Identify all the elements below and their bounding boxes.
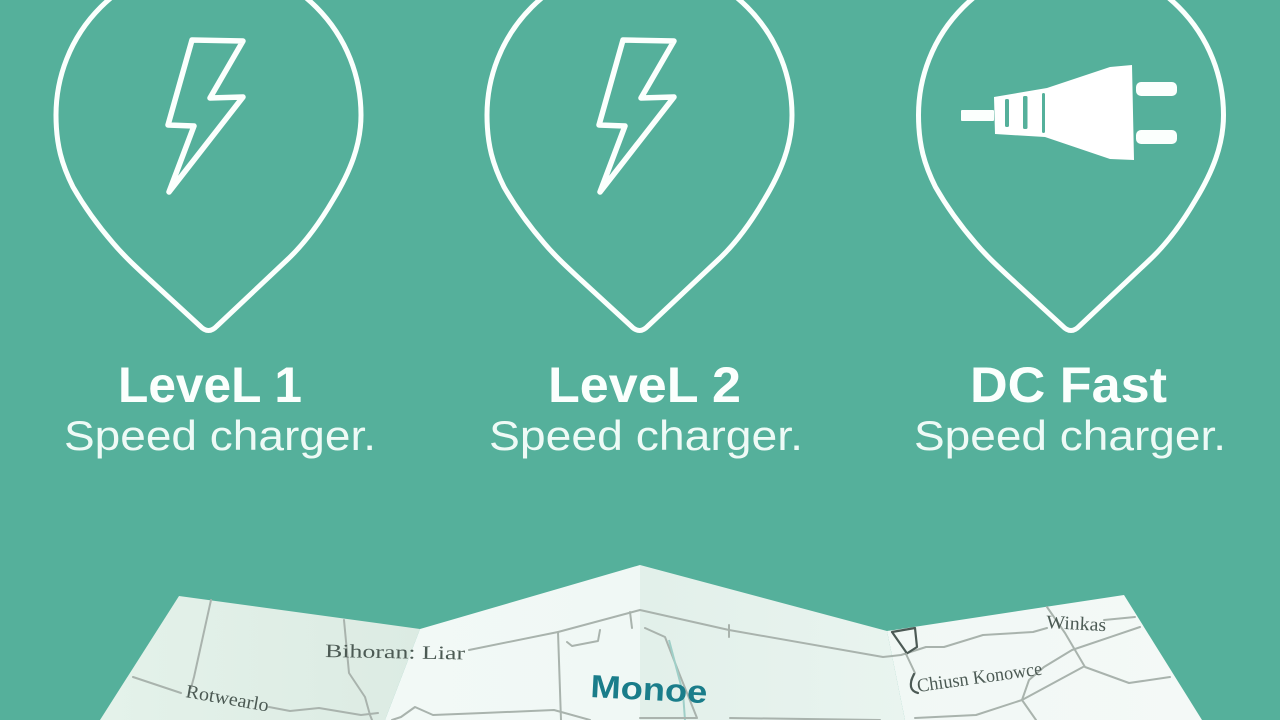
icon: plug (961, 65, 1177, 160)
text: Level 2 description: Speed charger. (489, 412, 803, 459)
panel: DC Fast charger (914, 0, 1226, 459)
heading: DC Fast: DC Fast (970, 357, 1167, 413)
map panel: centre left (385, 565, 640, 720)
folded map (100, 565, 1202, 720)
icon: Level 1 lightning bolt (168, 40, 243, 192)
map label: Rotwearlo: Rotwearlo (184, 681, 271, 717)
map panel: centre right (640, 565, 905, 720)
panel: Level 2 charger (487, 0, 803, 459)
map panel: far right (887, 595, 1202, 720)
heading: Level 2: LeveL 2 (548, 357, 741, 413)
icon: Level 2 map pin (487, 0, 792, 331)
panel: Level 1 charger (56, 0, 376, 459)
icon: Level 2 lightning bolt (599, 40, 674, 192)
icon: Level 1 map pin (56, 0, 361, 331)
text: Level 1 description: Speed charger. (64, 412, 376, 459)
map dark boundary (892, 628, 918, 693)
text: DC Fast description: Speed charger. (914, 412, 1226, 459)
map label: Bihoran Liar: Bihoran: Liar (325, 641, 466, 664)
heading: Level 1: LeveL 1 (118, 357, 302, 413)
map label: Monoe: Monoe (590, 668, 708, 710)
map label: Chiusn Konowce: Chiusn Konowce (916, 659, 1043, 697)
map panel: far left (100, 596, 420, 720)
map roads (133, 600, 1170, 720)
map label: Winkas: Winkas (1046, 612, 1107, 636)
icon: DC Fast map pin (918, 0, 1224, 331)
